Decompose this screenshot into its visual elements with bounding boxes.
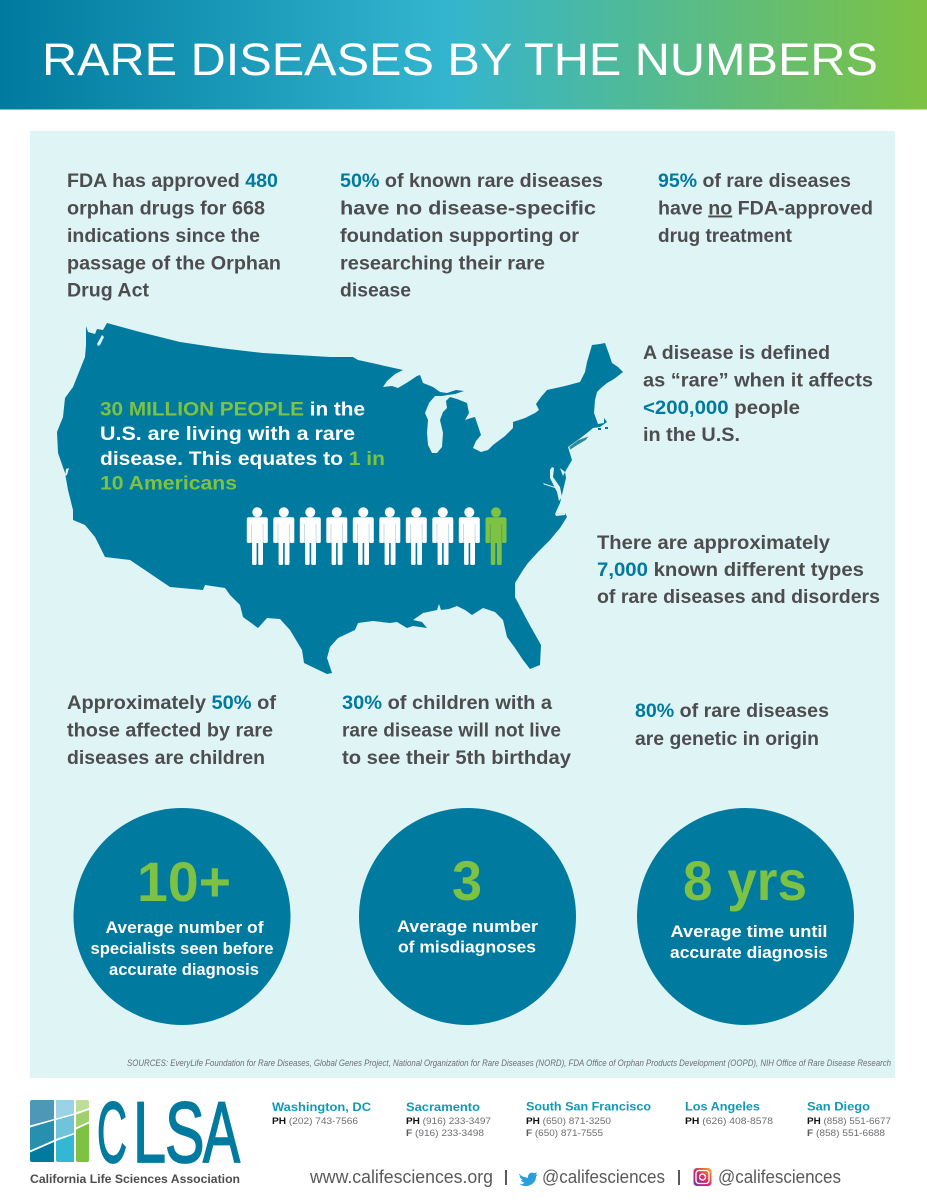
map callout: 30 million people: 30 MILLION PEOPLE in the xyxy=(100,398,365,420)
circle: time to diagnosis xyxy=(637,808,854,1025)
map callout: 30 million people: 10 Americans xyxy=(100,472,237,494)
person 4 xyxy=(326,507,347,565)
stat: FDA approved orphan drugs: indications since the xyxy=(67,225,260,247)
office: Sacramento xyxy=(406,1102,491,1139)
circle: specialists: 10+ xyxy=(137,850,231,913)
stat: definition of rare: in the U.S. xyxy=(643,424,740,446)
stat: half are children: diseases are children xyxy=(67,747,265,769)
person 5 xyxy=(353,507,374,565)
stat: no FDA-approved treatment: drug treatment xyxy=(658,225,792,247)
circle: misdiagnoses xyxy=(359,808,576,1025)
map callout: 30 million people: U.S. are living with a rare xyxy=(100,423,355,445)
main panel background xyxy=(30,131,895,1078)
office: Washington, DC: PH (202) 743-7566 xyxy=(272,1116,358,1127)
logo wordmark: C xyxy=(97,1085,127,1181)
Long Island xyxy=(569,436,589,450)
circle: specialists: Average number of xyxy=(106,919,264,937)
stat: 7,000 types: There are approximately xyxy=(597,532,830,554)
stat: definition of rare: as “rare” when it affects xyxy=(643,370,873,392)
office: San Diego: PH (858) 551-6677 xyxy=(807,1116,891,1127)
stat: no FDA-approved treatment: have no FDA-approved xyxy=(658,198,873,220)
stat: no disease-specific foundation xyxy=(340,170,603,302)
stat: definition of rare: <200,000 people xyxy=(643,397,800,419)
circle: specialists: specialists seen before xyxy=(90,940,274,958)
Puget Sound cut-out xyxy=(97,335,104,346)
office: San Diego xyxy=(807,1102,891,1139)
circle: time to diagnosis: 8 yrs xyxy=(683,849,807,912)
circle: misdiagnoses: 3 xyxy=(452,849,482,912)
stat: half are children xyxy=(67,692,277,769)
stat: FDA approved orphan drugs: passage of the Orphan xyxy=(67,252,281,274)
twitter handle: @califesciences xyxy=(542,1167,665,1187)
San Francisco Bay cut-out xyxy=(65,468,69,476)
person 10 highlighted green xyxy=(486,507,506,565)
header banner xyxy=(0,0,927,110)
logo mark xyxy=(30,1100,89,1162)
separator xyxy=(505,1170,507,1185)
circle: misdiagnoses: Average number xyxy=(397,918,539,936)
stat: definition of rare: A disease is defined xyxy=(643,342,830,364)
person 7 xyxy=(406,507,427,565)
stat: children survival xyxy=(342,692,571,769)
office: South San Francisco: F (650) 871-7555 xyxy=(526,1128,603,1139)
stat: half are children: those affected by rare xyxy=(67,720,273,742)
person 8 xyxy=(432,507,453,565)
stat: FDA approved orphan drugs xyxy=(67,170,281,302)
office: Washington, DC xyxy=(272,1102,371,1127)
stat: no FDA-approved treatment: 95% of rare diseases xyxy=(658,170,851,192)
logo wordmark: L xyxy=(133,1085,166,1181)
office: Sacramento: F (916) 233-3498 xyxy=(406,1128,484,1139)
office: Sacramento: PH (916) 233-3497 xyxy=(406,1116,491,1127)
office: Los Angeles: Los Angeles xyxy=(685,1102,760,1114)
pictogram: 1 in 10 people xyxy=(247,507,506,565)
office: Sacramento: Sacramento xyxy=(406,1102,480,1114)
stat: FDA approved orphan drugs: FDA has approved 480 xyxy=(67,170,278,192)
website and social links xyxy=(309,1167,841,1187)
circle: time to diagnosis: Average time until xyxy=(670,923,828,941)
stat: half are children: Approximately 50% of xyxy=(67,692,277,714)
stat: genetic origin: are genetic in origin xyxy=(635,728,819,750)
stat: genetic origin xyxy=(635,700,829,750)
title: RARE DISEASES BY THE NUMBERS xyxy=(42,34,878,85)
Delaware Bay cut-out xyxy=(560,468,565,476)
stat: 7,000 types xyxy=(597,532,880,608)
stat: no disease-specific foundation: disease xyxy=(340,280,411,302)
stat: FDA approved orphan drugs: orphan drugs for 668 xyxy=(67,198,265,220)
person 1 xyxy=(247,507,268,565)
stat: FDA approved orphan drugs: Drug Act xyxy=(67,280,150,302)
map callout: 30 million people xyxy=(100,398,385,494)
instagram handle: @califesciences xyxy=(718,1167,841,1187)
logo wordmark: A xyxy=(203,1085,240,1181)
stat: definition of rare xyxy=(643,342,873,446)
icon: twitter xyxy=(519,1172,538,1186)
office: South San Francisco: South San Francisco xyxy=(526,1102,651,1114)
office: Los Angeles: PH (626) 408-8578 xyxy=(685,1116,773,1127)
organisation name: California Life Sciences Association xyxy=(30,1172,240,1186)
circle: time to diagnosis: accurate diagnosis xyxy=(670,944,828,962)
office: San Diego: San Diego xyxy=(807,1102,870,1114)
circle: specialists: accurate diagnosis xyxy=(109,961,259,979)
circle: misdiagnoses: of misdiagnoses xyxy=(398,938,536,956)
CLSA logo xyxy=(30,1085,240,1186)
office: South San Francisco xyxy=(526,1102,651,1139)
person 9 xyxy=(459,507,480,565)
map of the United States xyxy=(57,323,623,674)
Cape islands xyxy=(598,427,608,430)
person 3 xyxy=(300,507,321,565)
stat: genetic origin: 80% of rare diseases xyxy=(635,700,829,722)
stat: 7,000 types: 7,000 known different types xyxy=(597,559,864,581)
stat: 7,000 types: of rare diseases and disorders xyxy=(597,586,880,608)
stat: children survival: rare disease will not live xyxy=(342,720,561,742)
office: South San Francisco: PH (650) 871-3250 xyxy=(526,1116,611,1127)
Chesapeake Bay cut-out xyxy=(543,467,565,516)
website: www.califesciences.org xyxy=(309,1167,493,1187)
office: Los Angeles xyxy=(685,1102,773,1127)
office: San Diego: F (858) 551-6688 xyxy=(807,1128,885,1139)
separator xyxy=(678,1170,680,1185)
stat: no disease-specific foundation: researching their rare xyxy=(340,252,545,274)
map callout: 30 million people: disease. This equates to 1 in xyxy=(100,448,385,470)
stat: children survival: 30% of children with a xyxy=(342,692,552,714)
icon: instagram xyxy=(694,1168,712,1186)
stat: children survival: to see their 5th birthday xyxy=(342,747,571,769)
office: Washington, DC: Washington, DC xyxy=(272,1102,371,1114)
person 2 xyxy=(273,507,294,565)
stat: no FDA-approved treatment xyxy=(658,170,873,247)
stat: no disease-specific foundation: have no disease-specific xyxy=(340,198,596,220)
circle: specialists xyxy=(74,808,290,1025)
person 6 xyxy=(379,507,400,565)
stat: no disease-specific foundation: foundation supporting or xyxy=(340,225,579,247)
logo wordmark: S xyxy=(165,1085,204,1181)
stat: no disease-specific foundation: 50% of known rare diseases xyxy=(340,170,603,192)
